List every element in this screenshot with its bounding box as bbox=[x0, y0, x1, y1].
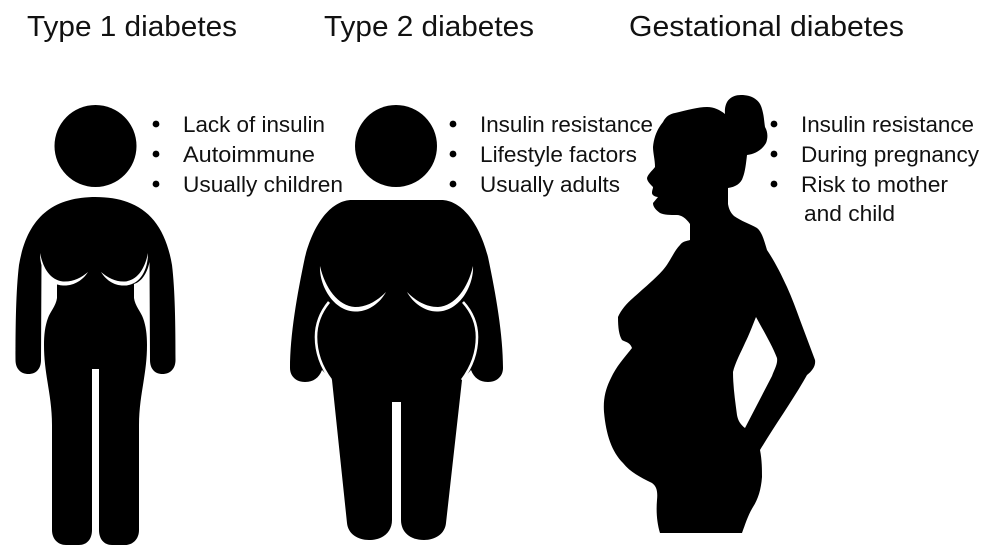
bullet list: type 2: Usually adults bbox=[480, 172, 620, 197]
heading: gestational diabetes: Gestational diabetes bbox=[629, 11, 904, 43]
bullet list: gestational: Insulin resistance bbox=[801, 112, 974, 137]
heading: type 2 diabetes: Type 2 diabetes bbox=[324, 11, 534, 43]
bullet list: gestational bbox=[771, 112, 980, 226]
panel: type 1 diabetes bbox=[16, 11, 343, 545]
icon: larger figure bbox=[290, 105, 503, 540]
icon: slim figure bbox=[16, 105, 176, 545]
bullet list: gestational: During pregnancy bbox=[801, 142, 980, 167]
icon: pregnant woman silhouette bbox=[604, 95, 815, 533]
bullet list: type 2: Lifestyle factors bbox=[480, 142, 637, 167]
bullet list: type 1: Usually children bbox=[183, 172, 343, 197]
heading: type 1 diabetes: Type 1 diabetes bbox=[27, 11, 237, 43]
bullet list: type 1 bbox=[153, 112, 343, 197]
bullet list: gestational: and child bbox=[804, 201, 895, 226]
bullet list: type 2 bbox=[450, 112, 653, 197]
bullet list: gestational: Risk to mother bbox=[801, 172, 949, 197]
bullet list: type 2: Insulin resistance bbox=[480, 112, 653, 137]
bullet list: type 1: Autoimmune bbox=[183, 142, 315, 167]
panel: type 2 diabetes bbox=[290, 11, 653, 540]
panel: gestational diabetes bbox=[604, 11, 980, 533]
bullet list: type 1: Lack of insulin bbox=[183, 112, 325, 137]
